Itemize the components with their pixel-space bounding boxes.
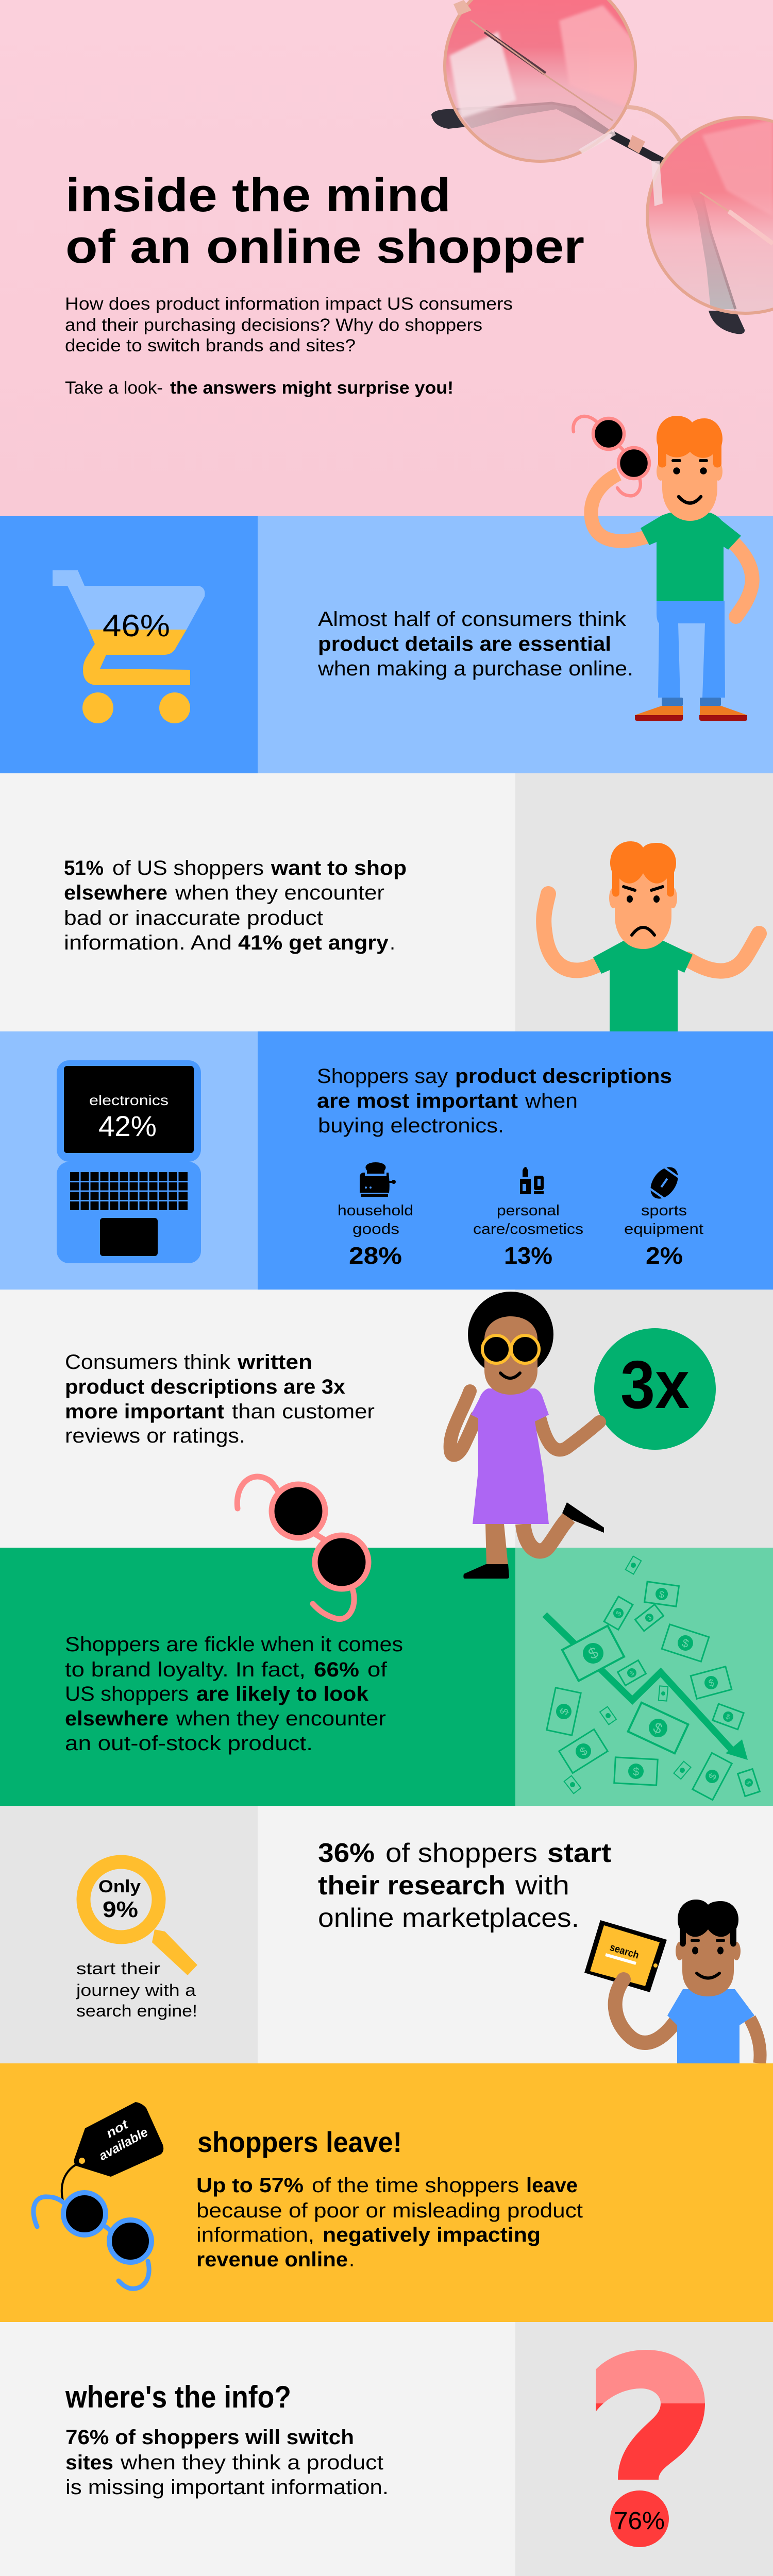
- title: [65, 169, 584, 273]
- icon: magnifier only 9%: Only: [98, 1877, 141, 1896]
- text: shop elsewhere: want to shop: [271, 857, 407, 879]
- text: brand loyalty: elsewhere: [65, 1707, 169, 1730]
- panel: research starts: [0, 1806, 773, 2063]
- text: switch sites: 76% of shoppers will switch: [65, 2426, 354, 2449]
- text: product descriptions: are most important: [317, 1090, 518, 1112]
- text: shop elsewhere: elsewhere: [64, 882, 167, 904]
- text: product details: when making a purchase online.: [317, 657, 633, 680]
- icon: question mark 76%: 76%: [614, 2507, 665, 2535]
- stat: household goods: goods: [352, 1221, 399, 1238]
- text: product descriptions: Shoppers say: [317, 1065, 448, 1088]
- icon: question mark 76%: [596, 2350, 705, 2547]
- text: shop elsewhere: information. And: [64, 931, 232, 954]
- text: switch sites: is missing important information.: [65, 2476, 389, 2499]
- text: brand loyalty: US shoppers: [65, 1683, 189, 1705]
- text: brand loyalty: of: [367, 1658, 388, 1681]
- text: written descriptions: more important: [65, 1400, 224, 1423]
- intro text: How does product information impact US consumers: [65, 294, 513, 314]
- panel: written descriptions 3x: [0, 1290, 773, 1548]
- text: product details: product details are essential: [318, 633, 611, 655]
- icon: magnifier only 9%: [83, 1862, 197, 1975]
- icon: not available tag: available: [96, 2125, 150, 2163]
- illustration: falling money chart: $: [651, 1719, 665, 1737]
- badge: 3x: [594, 1328, 716, 1450]
- badge: 3x: 3x: [620, 1347, 690, 1422]
- text: shop elsewhere: [64, 857, 407, 954]
- text: shop elsewhere: bad or inaccurate product: [64, 907, 323, 929]
- text: shop elsewhere: .: [390, 931, 395, 954]
- illustration: falling money chart: $: [680, 1636, 691, 1650]
- illustration: falling money chart: $: [632, 1765, 640, 1778]
- text: brand loyalty: to brand loyalty. In fact,: [65, 1658, 306, 1681]
- heading: shoppers leave: shoppers leave!: [197, 2126, 402, 2158]
- text: revenue impact: Up to 57%: [196, 2174, 304, 2197]
- stat: household goods: household: [338, 1202, 413, 1219]
- illustration: falling money chart: $: [628, 1669, 635, 1677]
- text: written descriptions: Consumers think: [65, 1351, 231, 1374]
- stat: sports equipment: sports: [641, 1202, 687, 1219]
- text: revenue impact: revenue online: [196, 2248, 348, 2271]
- stat: sports equipment: [624, 1162, 703, 1269]
- text: revenue impact: of the time shoppers: [312, 2174, 519, 2197]
- title: of an online shopper: [65, 221, 584, 273]
- illustration: falling money chart: $: [745, 1781, 752, 1785]
- title: inside the mind: [65, 169, 451, 222]
- intro text: and their purchasing decisions? Why do shoppers: [65, 315, 482, 335]
- intro text: the answers might surprise you!: [170, 378, 453, 398]
- icon: football: [645, 1162, 684, 1204]
- icon: shopping cart 46%: [53, 570, 205, 723]
- stat: sports equipment: equipment: [624, 1221, 703, 1238]
- stat: household goods: 28%: [349, 1242, 402, 1269]
- intro text: Take a look-: [65, 378, 163, 398]
- photo: pink round sunglasses: [431, 0, 773, 334]
- text: switch sites: [65, 2426, 389, 2499]
- text: switch sites: sites: [65, 2451, 113, 2474]
- text: product descriptions: [317, 1065, 672, 1137]
- illustration: falling money chart: $: [647, 1615, 653, 1621]
- character: angry boy: [544, 841, 759, 1031]
- text: written descriptions: than customer: [232, 1400, 375, 1423]
- panel: 46 percent product details: [0, 516, 773, 773]
- text: revenue impact: because of poor or misleading product: [196, 2199, 583, 2222]
- icon: not available tag: not: [104, 2117, 131, 2141]
- icon: not available tag: [62, 2102, 163, 2200]
- text: product descriptions: product descriptions: [455, 1065, 672, 1088]
- icon: laptop: 42%: [98, 1110, 157, 1142]
- text: search engine: start their: [76, 1959, 160, 1978]
- icon: toaster: [360, 1162, 396, 1197]
- intro text: [65, 294, 513, 398]
- text: shop elsewhere: 41% get angry: [238, 931, 389, 954]
- text: shop elsewhere: 51%: [64, 857, 104, 879]
- icon: shopping cart 46%: 46%: [103, 608, 170, 643]
- stat: personal care/cosmetics: personal: [497, 1202, 560, 1219]
- text: online marketplaces: 36%: [318, 1838, 375, 1868]
- text: brand loyalty: are likely to look: [196, 1683, 369, 1705]
- stat: personal care/cosmetics: 13%: [504, 1242, 552, 1269]
- stat: sports equipment: 2%: [646, 1242, 683, 1269]
- illustration: falling money chart: $: [614, 1609, 623, 1617]
- text: search engine: journey with a: [76, 1981, 196, 1999]
- icon: tablet: search: [609, 1942, 640, 1961]
- text: online marketplaces: of shoppers: [385, 1838, 537, 1868]
- text: written descriptions: written: [237, 1351, 312, 1374]
- text: brand loyalty: an out-of-stock product.: [65, 1732, 313, 1755]
- text: revenue impact: information,: [196, 2224, 314, 2246]
- text: revenue impact: leave: [526, 2174, 578, 2197]
- illustration: falling money chart: $: [578, 1744, 590, 1758]
- icon: lipstick and polish: [520, 1167, 544, 1194]
- text: online marketplaces: start: [547, 1838, 611, 1868]
- stat: personal care/cosmetics: care/cosmetics: [473, 1221, 583, 1238]
- text: brand loyalty: 66%: [314, 1658, 359, 1681]
- illustration: falling money chart: $: [585, 1644, 601, 1663]
- text: brand loyalty: when they encounter: [176, 1707, 386, 1730]
- text: product details: [317, 608, 633, 680]
- text: revenue impact: [196, 2174, 583, 2271]
- text: brand loyalty: Shoppers are fickle when it comes: [65, 1633, 403, 1656]
- panel: 51 percent want to shop elsewhere: [0, 773, 773, 1031]
- text: switch sites: when they think a product: [120, 2451, 383, 2474]
- panel: brand loyalty 66 percent: [0, 1548, 773, 1806]
- icon: laptop: [57, 1060, 201, 1263]
- icon: large pink sunglasses: [237, 1477, 368, 1619]
- panel: electronics 42 percent: [0, 1031, 773, 1290]
- panel: hero: [0, 0, 773, 516]
- stat: household goods: [338, 1162, 413, 1269]
- character: woman with sunglasses and afro: [450, 1292, 604, 1579]
- illustration: falling money chart: $: [659, 1589, 665, 1600]
- icon: laptop: electronics: [89, 1092, 169, 1108]
- text: revenue impact: .: [349, 2248, 355, 2271]
- text: online marketplaces: online marketplaces.: [318, 1903, 579, 1933]
- icon: magnifier only 9%: 9%: [103, 1897, 138, 1922]
- text: shop elsewhere: of US shoppers: [112, 857, 264, 879]
- intro text: decide to switch brands and sites?: [65, 336, 356, 355]
- icon: small pink sunglasses: [573, 416, 649, 496]
- text: revenue impact: negatively impacting: [323, 2224, 541, 2246]
- illustration: falling money chart: [545, 1556, 760, 1800]
- illustration: falling money chart: $: [557, 1707, 571, 1716]
- text: search engine: [76, 1959, 197, 2020]
- text: product details: Almost half of consumers think: [318, 608, 627, 631]
- panel: shoppers leave: [0, 2063, 773, 2322]
- text: written descriptions: [65, 1351, 375, 1447]
- illustration: falling money chart: $: [707, 1771, 719, 1782]
- illustration: falling money chart: $: [708, 1677, 716, 1689]
- icon: blue sunglasses: [33, 2193, 152, 2289]
- text: brand loyalty: [65, 1633, 403, 1755]
- illustration: falling money chart: $: [725, 1712, 731, 1721]
- text: product descriptions: when: [525, 1090, 578, 1112]
- text: online marketplaces: their research: [318, 1871, 506, 1901]
- text: shop elsewhere: when they encounter: [175, 882, 384, 904]
- icon: tablet: [584, 1920, 667, 1992]
- text: product descriptions: buying electronics.: [318, 1114, 504, 1137]
- text: online marketplaces: with: [515, 1871, 569, 1901]
- panel: where's the info: [0, 2322, 773, 2576]
- text: written descriptions: reviews or ratings.: [65, 1425, 245, 1447]
- stat: personal care/cosmetics: [473, 1167, 583, 1269]
- heading: where's the info: where's the info?: [65, 2380, 291, 2414]
- text: search engine: search engine!: [76, 2002, 197, 2020]
- character: boy with tablet: [584, 1900, 760, 2063]
- character: boy holding pink sunglasses: [573, 416, 752, 721]
- text: written descriptions: product descriptions are 3x: [65, 1376, 345, 1398]
- text: online marketplaces: [318, 1838, 611, 1933]
